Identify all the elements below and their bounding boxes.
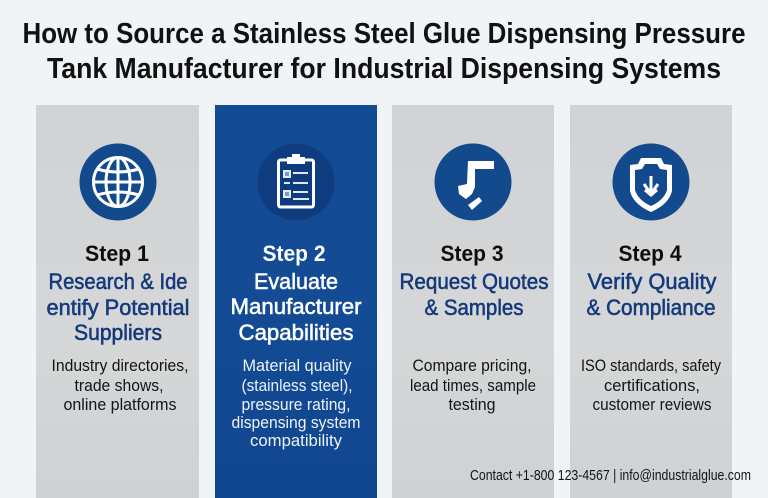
step 4 description: customer reviews: [592, 396, 712, 414]
title: [22, 18, 746, 85]
panel: step 3: [392, 105, 554, 498]
step 2 heading: Evaluate: [254, 269, 338, 294]
step 1 description: [52, 357, 188, 414]
step 4 description: [581, 357, 722, 414]
step 4 heading: & Compliance: [586, 295, 716, 320]
icon: clipboard checklist: [258, 144, 334, 220]
step 1 heading: [46, 269, 190, 345]
step 1 heading: Suppliers: [74, 320, 162, 345]
step 4 heading: Verify Quality: [588, 269, 716, 294]
title: Tank Manufacturer for Industrial Dispensing Systems: [47, 53, 721, 85]
step 1 description: trade shows,: [74, 377, 164, 395]
step 1 heading: entify Potential: [46, 295, 190, 320]
step 2 label: Step 2: [262, 241, 326, 266]
step 1 description: online platforms: [64, 396, 176, 414]
panel: step 2: [215, 105, 377, 498]
step 2 description: dispensing system: [232, 414, 360, 432]
step 3 description: [410, 357, 536, 414]
step 2 heading: Capabilities: [238, 320, 354, 345]
step 3 heading: Request Quotes: [400, 269, 548, 294]
panel: step 1: [36, 105, 199, 498]
step 1 description: Industry directories,: [52, 357, 188, 375]
step 3 description: testing: [448, 396, 496, 414]
icon: quote request mark: [434, 144, 512, 220]
step 3 description: Compare pricing,: [412, 357, 532, 375]
step 2 heading: Manufacturer: [230, 294, 362, 319]
step 3 description: lead times, sample: [410, 377, 536, 395]
step 2 description: compatibility: [250, 432, 343, 450]
step 2 description: Material quality: [242, 357, 352, 375]
step 3 label: Step 3: [440, 241, 504, 266]
step 1 label: Step 1: [85, 241, 149, 266]
step 4 description: certifications,: [604, 377, 700, 395]
icon: shield: [612, 144, 690, 220]
step 4 heading: [586, 269, 716, 320]
icon: globe: [80, 144, 156, 220]
step 2 description: pressure rating,: [242, 396, 350, 414]
panel: step 4: [570, 105, 732, 498]
step 3 heading: [400, 269, 548, 320]
step 3 heading: & Samples: [424, 295, 524, 320]
step 2 description: [232, 357, 360, 450]
step 4 description: ISO standards, safety: [581, 357, 722, 375]
step 2 description: (stainless steel),: [242, 377, 352, 395]
step 4 label: Step 4: [618, 241, 682, 266]
step 1 heading: Research & Ide: [48, 269, 188, 294]
step 2 heading: [230, 269, 362, 345]
